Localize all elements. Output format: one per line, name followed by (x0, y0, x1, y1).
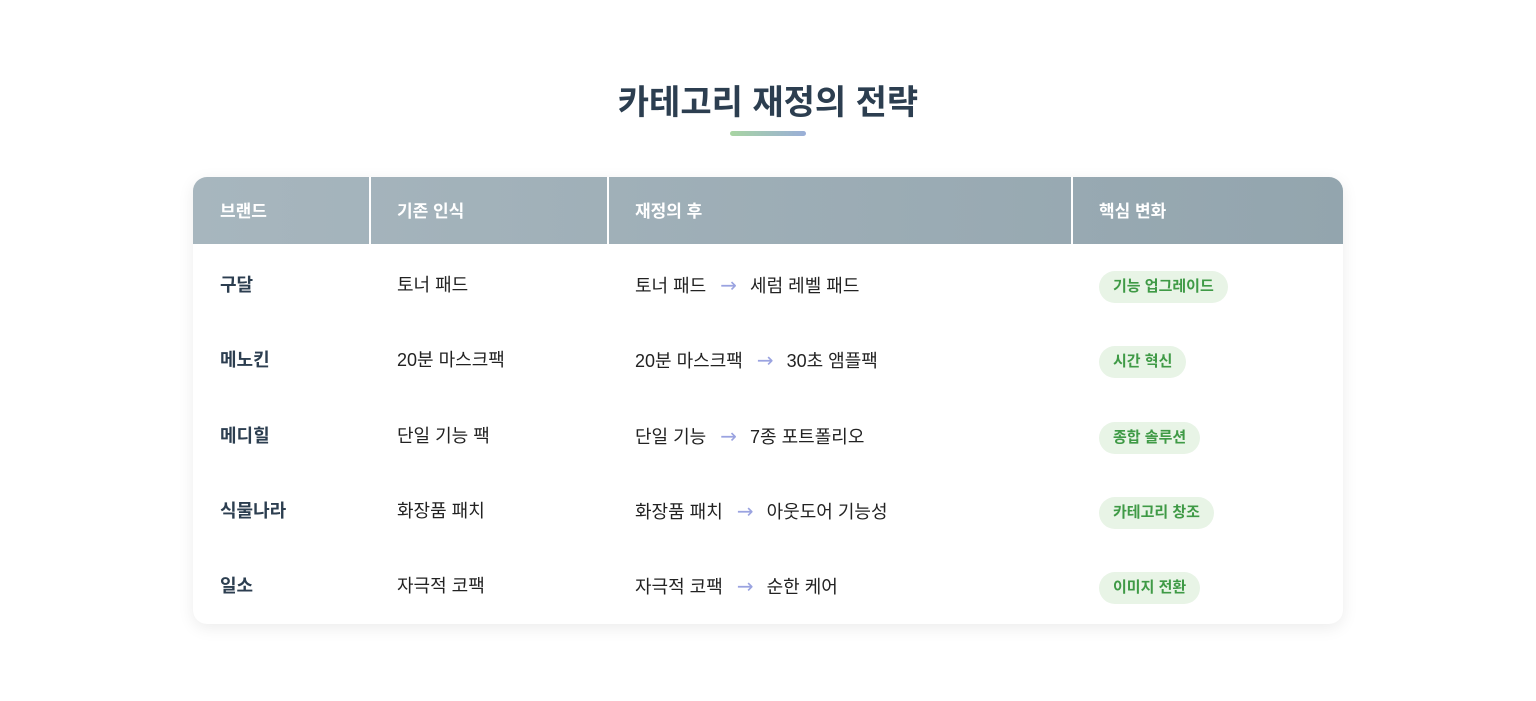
table header (193, 177, 1343, 244)
row: 메노킨 (220, 346, 1186, 378)
row: 메디힐: 메디힐 (220, 426, 270, 446)
table header: 기존 인식 (397, 202, 464, 221)
row: 식물나라: 화장품 패치 (397, 501, 485, 521)
row: 구달: 토너 패드 (397, 275, 468, 295)
title underline (730, 131, 806, 136)
panel: table (193, 177, 1343, 624)
row: 메노킨: 시간 혁신 (1113, 353, 1172, 370)
row: 식물나라: 식물나라 (220, 501, 286, 521)
table header: 재정의 후 (635, 202, 702, 221)
row: 식물나라: 카테고리 창조 (1113, 504, 1200, 521)
title: 카테고리 재정의 전략 (618, 84, 918, 122)
row: 메디힐 (220, 422, 1200, 454)
row: 일소: 자극적 코팩 (397, 576, 485, 596)
row: 메노킨: 20분 마스크팩 → 30초 앰플팩 (635, 348, 878, 372)
row: 일소: 이미지 전환 (1113, 579, 1186, 596)
row: 식물나라 (220, 497, 1214, 529)
row: 메디힐: 단일 기능 → 7종 포트폴리오 (635, 424, 864, 448)
table header: 브랜드 (220, 202, 267, 221)
row: 메노킨: 메노킨 (220, 350, 270, 370)
row: 일소: 일소 (220, 576, 253, 596)
row: 메노킨: 20분 마스크팩 (397, 350, 505, 370)
row: 구달: 기능 업그레이드 (1113, 278, 1214, 295)
row: 일소: 자극적 코팩 → 순한 케어 (635, 574, 838, 598)
row: 구달: 구달 (220, 275, 253, 295)
row: 메디힐: 종합 솔루션 (1113, 429, 1186, 446)
row: 구달 (220, 271, 1228, 303)
row: 일소 (220, 572, 1200, 604)
row: 메디힐: 단일 기능 팩 (397, 426, 490, 446)
table header: 핵심 변화 (1099, 202, 1166, 221)
row: 구달: 토너 패드 → 세럼 레벨 패드 (635, 273, 859, 297)
row: 식물나라: 화장품 패치 → 아웃도어 기능성 (635, 499, 888, 523)
